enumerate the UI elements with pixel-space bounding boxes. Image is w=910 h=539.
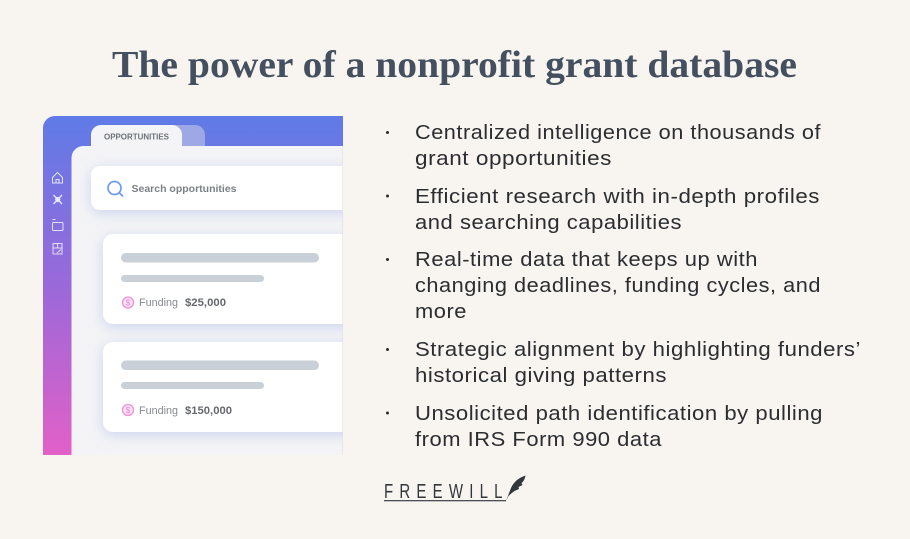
icon: folder — [52, 220, 63, 230]
bullet 3: changing deadlines, funding cycles, and — [415, 274, 821, 297]
content panel — [72, 146, 343, 455]
search box — [91, 166, 361, 210]
icon: funding coin — [122, 297, 134, 308]
bullet list — [386, 121, 861, 451]
icon: crossed tools — [54, 195, 62, 204]
panel: app mockup — [43, 116, 373, 455]
bullet 4: historical giving patterns — [415, 364, 667, 387]
bullet 2: and searching capabilities — [415, 211, 682, 234]
bullet 5: from IRS Form 990 data — [415, 428, 662, 451]
bullet 5 — [386, 402, 823, 451]
bullet 1: grant opportunities — [415, 147, 612, 170]
icon: form — [53, 244, 62, 254]
bullet 2: Efficient research with in-depth profiles — [415, 185, 820, 208]
icon: home — [52, 172, 62, 183]
card: $25,000: Funding — [139, 297, 178, 309]
bullet 3: Real-time data that keeps up with — [415, 248, 758, 271]
bullet 4 — [386, 338, 861, 387]
bullet 5: Unsolicited path identification by pulling — [415, 402, 823, 425]
logo: FreeWill: FREEWILL — [384, 480, 503, 503]
icon: funding coin: $ — [126, 406, 131, 415]
sidebar gradient — [43, 116, 343, 455]
tab: opportunities — [91, 125, 182, 147]
bullet 1: Centralized intelligence on thousands of — [415, 121, 821, 144]
tab: opportunities: OPPORTUNITIES — [104, 132, 169, 142]
title: The power of a nonprofit grant database — [112, 44, 797, 86]
back tab — [172, 125, 205, 146]
card: $150,000: Funding — [139, 405, 178, 417]
card: $150,000 — [103, 342, 373, 432]
search box: Search opportunities — [132, 183, 237, 195]
icon: magnifier — [108, 182, 122, 196]
icon: funding coin — [122, 404, 134, 416]
icon: feather quill — [506, 476, 526, 501]
icon: funding coin: $ — [126, 298, 131, 308]
card: $25,000 — [103, 234, 373, 324]
bullet 3 — [386, 248, 821, 323]
card: $25,000: $25,000 — [185, 297, 226, 309]
card: $150,000: $150,000 — [185, 405, 232, 417]
bullet 4: Strategic alignment by highlighting funders’ — [415, 338, 861, 361]
bullet 2 — [386, 185, 820, 234]
bullet 1 — [386, 121, 821, 170]
bullet 3: more — [415, 300, 467, 323]
